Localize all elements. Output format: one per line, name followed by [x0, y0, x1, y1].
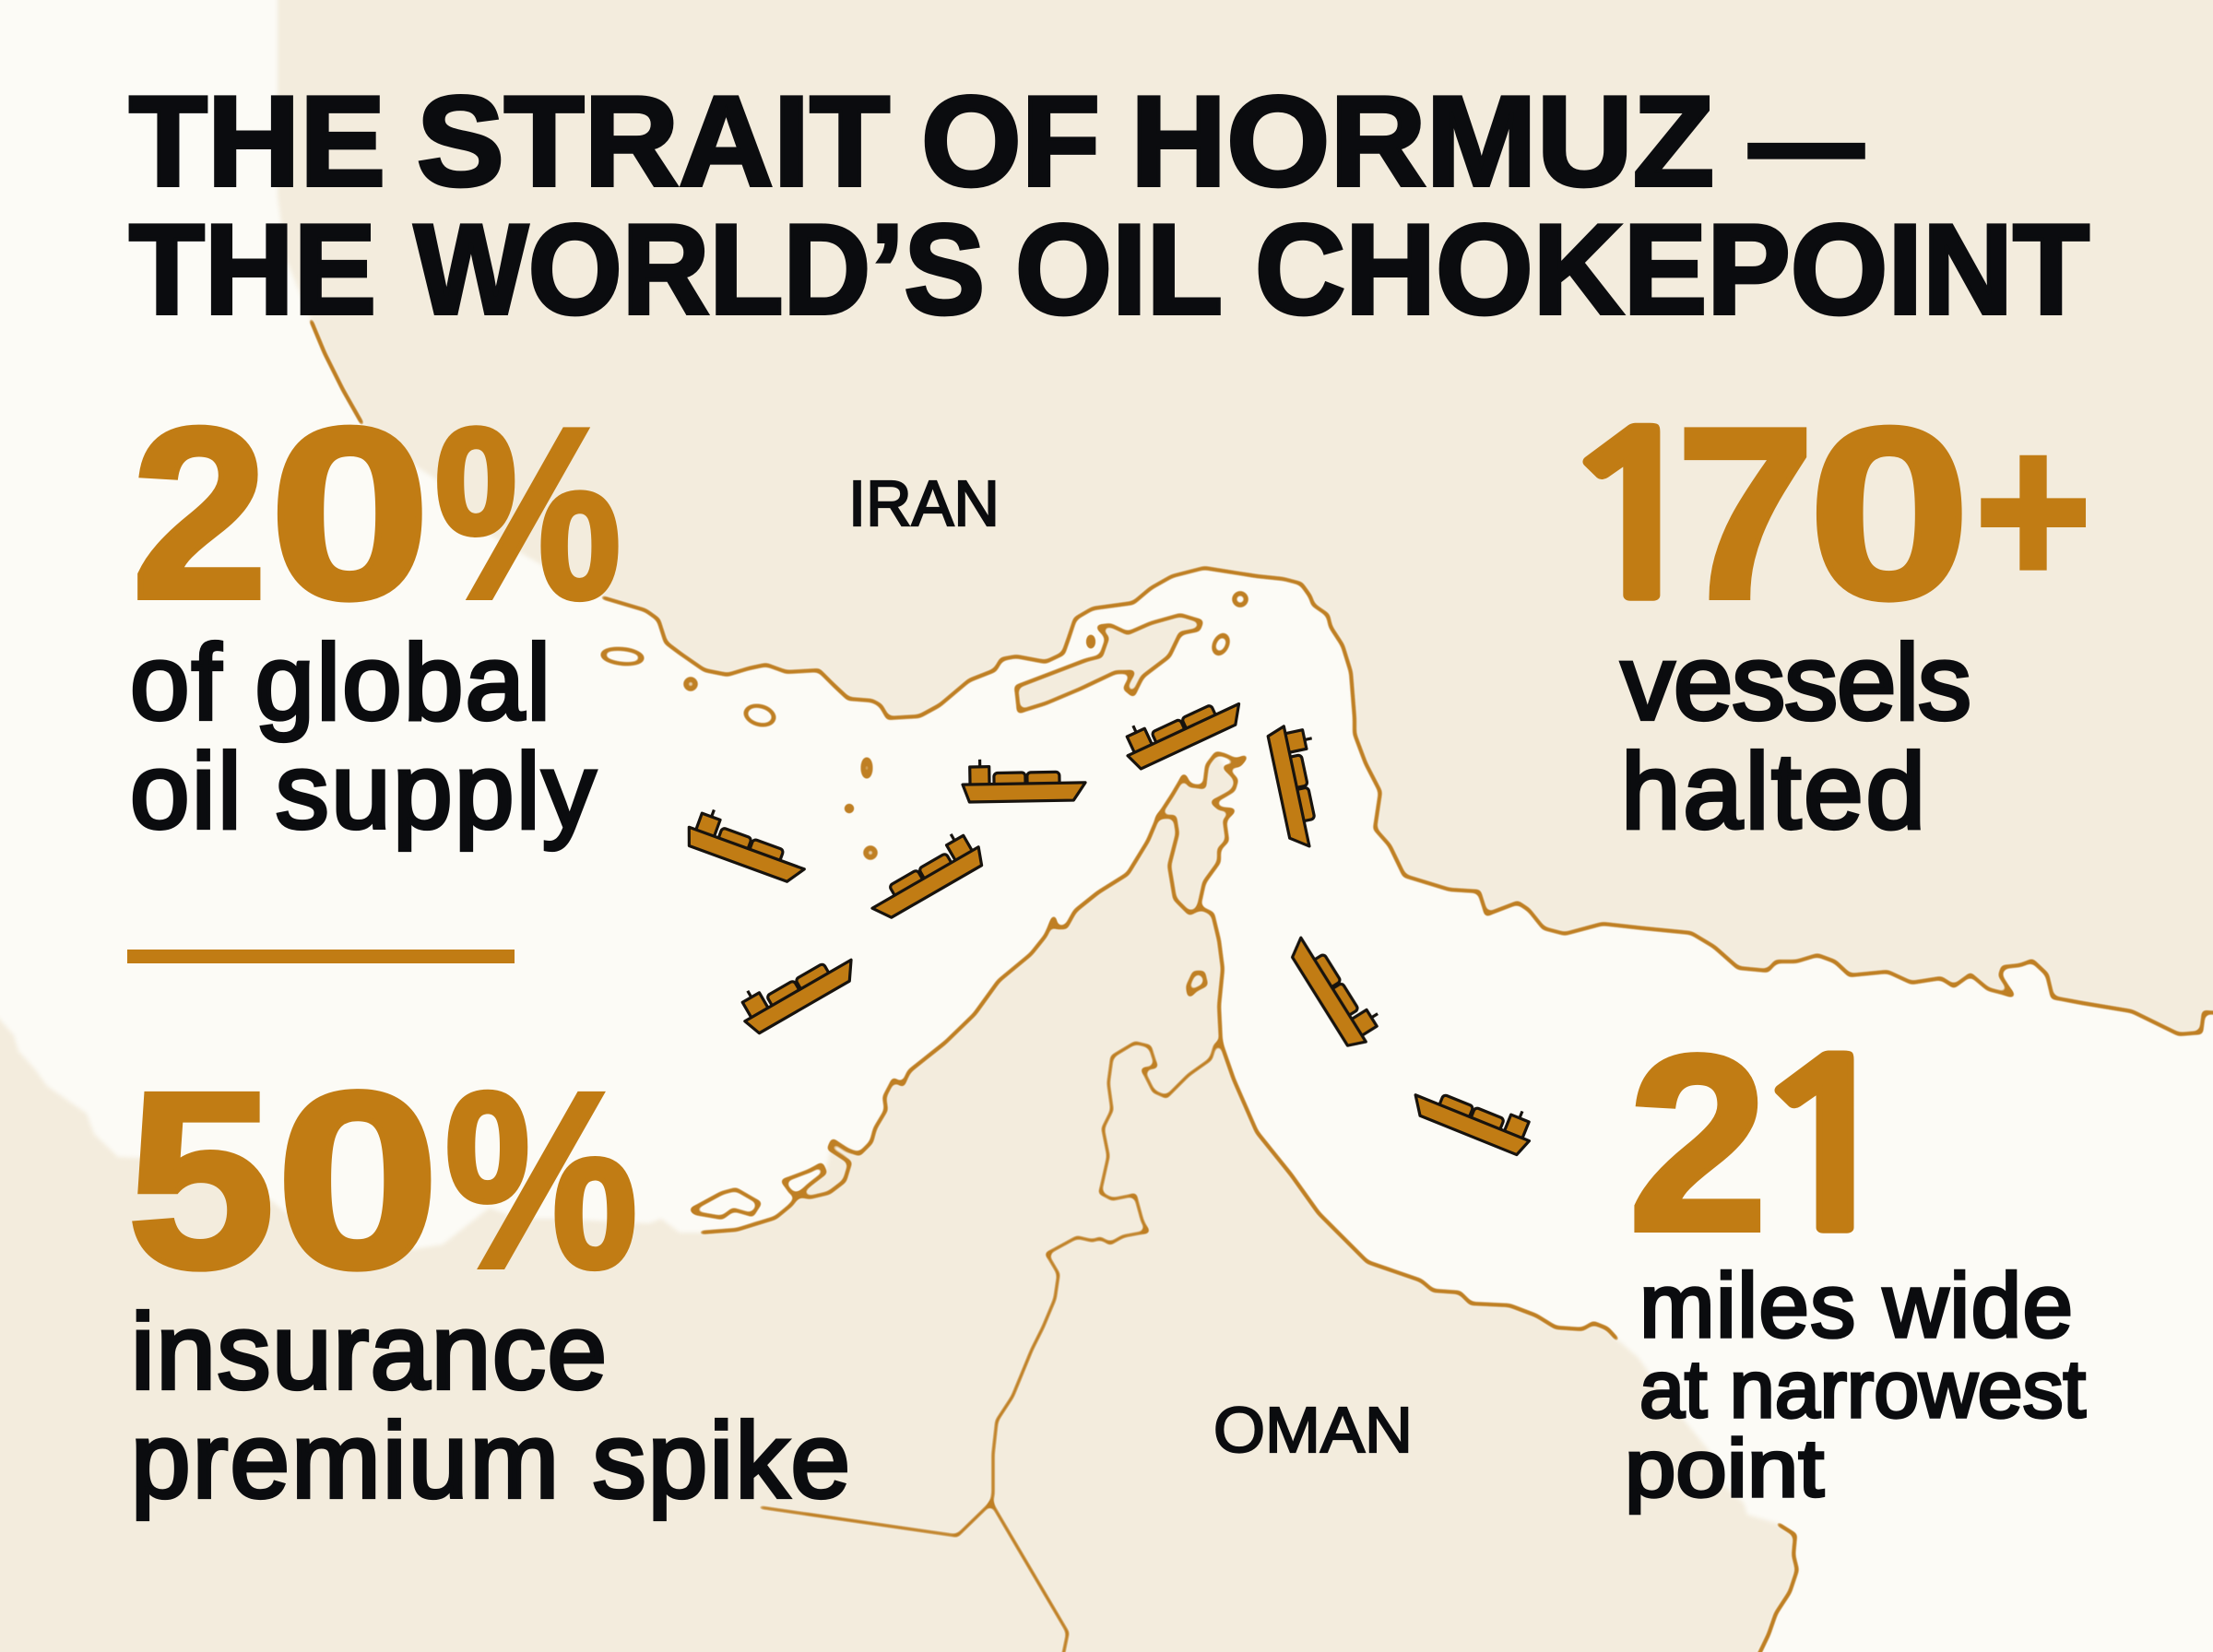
- ship 2: [859, 825, 988, 924]
- title: OF: [921, 70, 1100, 213]
- stat: 21 miles wide at narrowest point: at narrowest: [1639, 1343, 2086, 1434]
- title: [129, 70, 2089, 341]
- stat: 21 miles wide at narrowest point: 2: [1628, 1003, 1768, 1283]
- stat: 50% insurance premium spike: premium spike: [131, 1400, 850, 1520]
- land: Iran: [278, 0, 2213, 1034]
- stat: 20% of global oil supply: of global: [130, 622, 550, 742]
- stat: 170+ vessels halted: 1: [1550, 407, 1721, 631]
- title: HORMUZ: [1130, 70, 1714, 213]
- coastlines, islands and borders: [311, 320, 2213, 1652]
- ship 7: [1286, 925, 1387, 1051]
- ship 4: [963, 758, 1085, 802]
- stat: 50% insurance premium spike: %: [444, 1040, 638, 1320]
- coastline: UAE and Musandam to Oman: [701, 753, 1617, 1339]
- ship 3: [732, 938, 860, 1036]
- coastline: Iran north-west: [311, 320, 362, 424]
- coastline: Oman south-east: [1757, 1524, 1797, 1652]
- stat: 20% of global oil supply: oil supply: [130, 731, 596, 851]
- label: Oman: OMAN: [1213, 1394, 1413, 1466]
- island: blob near the UAE coast: [692, 1189, 760, 1218]
- title: THE: [129, 70, 385, 213]
- stat: 50% insurance premium spike: 5: [127, 1040, 275, 1320]
- stat: 170+ vessels halted: 0: [1808, 377, 1970, 649]
- title: —: [1749, 70, 1864, 213]
- title: CHOKEPOINT: [1255, 198, 2089, 341]
- stat: 170+ vessels halted: vessels: [1621, 622, 1971, 742]
- border: Oman south: [991, 1503, 1068, 1652]
- stat: 170+ vessels halted: [1550, 377, 2091, 851]
- ship 5: [1118, 681, 1247, 772]
- stat: 21 miles wide at narrowest point: miles wide: [1639, 1255, 2073, 1356]
- land: Oman and UAE: [0, 753, 1797, 1652]
- title: OIL: [1015, 198, 1223, 341]
- stat: 50% insurance premium spike: [127, 1040, 850, 1520]
- title: STRAIT: [417, 70, 890, 213]
- label: Iran: IRAN: [848, 467, 1000, 539]
- stat: 21 miles wide at narrowest point: 1: [1741, 1033, 1916, 1265]
- stat: 50% insurance premium spike: insurance: [131, 1292, 607, 1411]
- coastline: Iran: [602, 568, 2213, 1034]
- border: UAE and Oman: [760, 1043, 1221, 1536]
- ship 8: [1409, 1072, 1539, 1157]
- ship 6: [1267, 721, 1333, 850]
- coastline: Musandam inner border: [1157, 817, 1199, 914]
- divider: [127, 950, 515, 963]
- stat: 20% of global oil supply: [130, 377, 621, 851]
- island: Qeshm outline: [1016, 615, 1201, 712]
- stat: 50% insurance premium spike: 0: [276, 1040, 440, 1320]
- title: WORLD’S: [414, 198, 985, 341]
- stat: 21 miles wide at narrowest point: [1625, 1003, 2086, 1514]
- land: Qeshm island fill: [1016, 615, 1201, 712]
- stat: 21 miles wide at narrowest point: point: [1625, 1422, 1824, 1514]
- stat: 20% of global oil supply: %: [434, 377, 621, 649]
- stat: 170+ vessels halted: halted: [1621, 731, 1925, 851]
- ship 1: [683, 804, 813, 886]
- title: THE: [129, 198, 376, 341]
- stat: 170+ vessels halted: 7: [1676, 377, 1815, 649]
- stat: 20% of global oil supply: 2: [132, 377, 267, 649]
- stat: 170+ vessels halted: +: [1975, 389, 2091, 631]
- small islands in the gulf: [601, 593, 1247, 996]
- stat: 20% of global oil supply: 0: [269, 377, 431, 649]
